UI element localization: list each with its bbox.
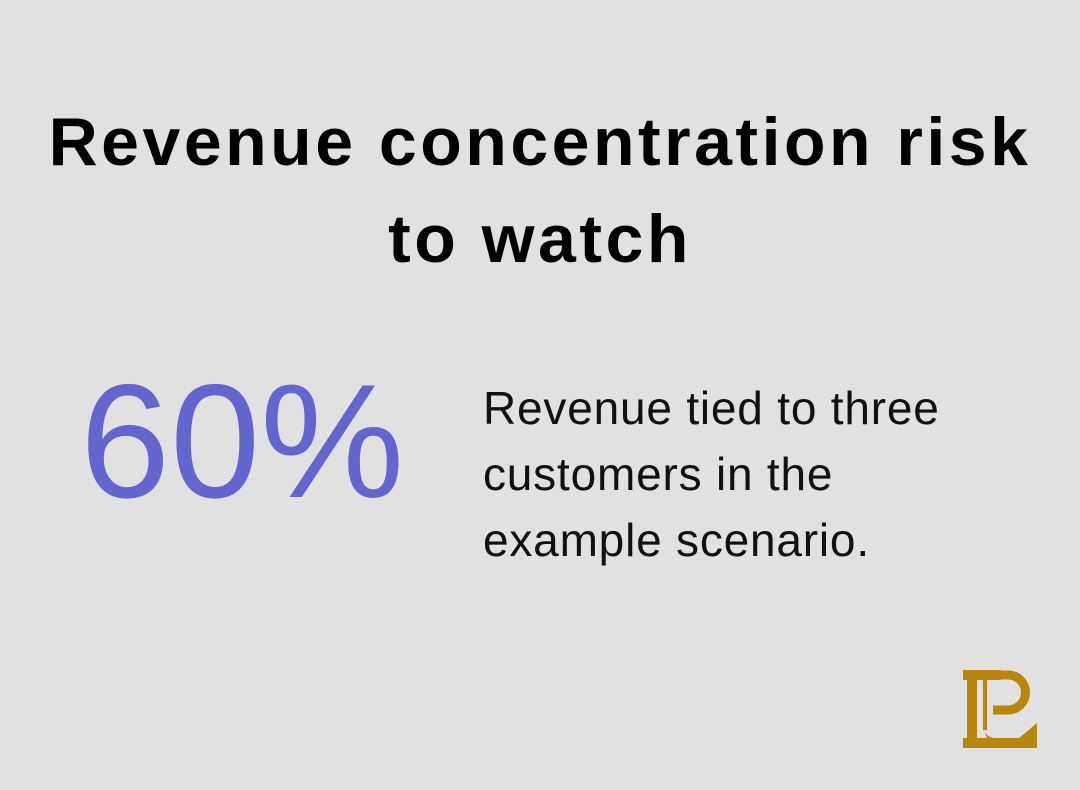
title (49, 104, 1031, 277)
stat description: example scenario. (483, 514, 870, 566)
title: Revenue concentration risk (49, 104, 1031, 180)
stat description (483, 382, 940, 566)
stat description: customers in the (483, 448, 833, 500)
stat: 60%: 60% (80, 351, 404, 532)
title: to watch (388, 201, 692, 277)
stat description: Revenue tied to three (483, 382, 940, 434)
